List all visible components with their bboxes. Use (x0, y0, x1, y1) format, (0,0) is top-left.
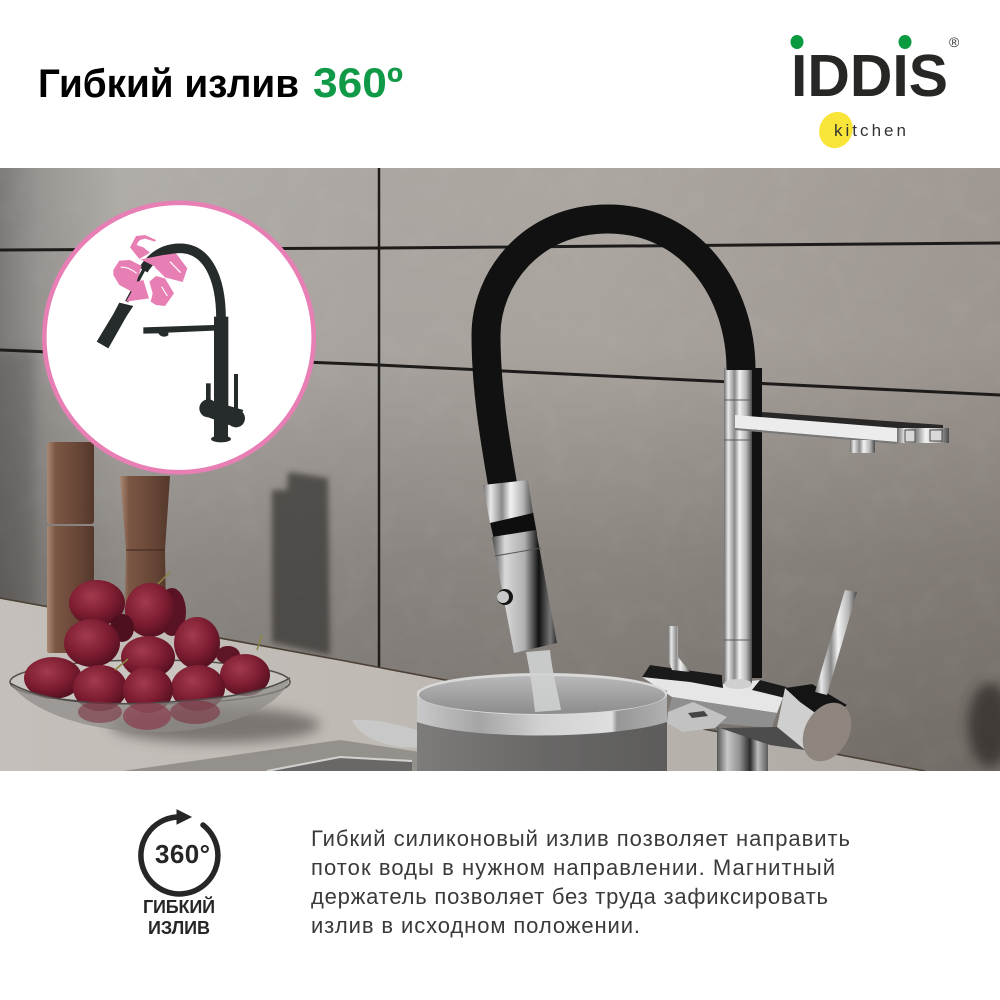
small lever (668, 626, 690, 672)
logo: IDDIS kitchen: IDDIS (791, 43, 948, 109)
mixer cone (777, 684, 847, 750)
wall shadow (272, 472, 330, 655)
icon: 360 degree badge (141, 810, 218, 894)
pull-out spray head (483, 480, 557, 653)
badge label: ИЗЛИВ (148, 918, 210, 938)
pot handles (352, 720, 417, 748)
faucet base (642, 590, 861, 771)
water stream (526, 650, 561, 712)
description text: держатель позволяет без труда зафиксировать (311, 884, 828, 909)
faucet column (724, 368, 752, 689)
wall tiles (0, 168, 1000, 771)
description text: поток воды в нужном направлении. Магнитный (311, 855, 835, 880)
logo: IDDIS kitchen (790, 34, 960, 154)
logo: IDDIS kitchen: kitchen (834, 121, 906, 140)
kitchen photo scene (0, 168, 1000, 775)
logo: IDDIS kitchen: ® (949, 34, 960, 50)
lever (815, 590, 857, 695)
icon: pink rotation arrows (113, 235, 187, 306)
circle badge (44, 203, 314, 472)
icon: faucet silhouette (97, 248, 245, 442)
plate shadow (110, 707, 320, 743)
base body (642, 665, 787, 713)
title: 360º (313, 59, 403, 106)
base pedestal (717, 727, 768, 771)
faucet side spout (735, 412, 949, 453)
title: Гибкий излив (38, 62, 299, 106)
faucet column shadow (752, 368, 762, 678)
description text (311, 826, 850, 938)
cooking pot (352, 673, 727, 775)
pepper mills (47, 442, 170, 653)
description text: излив в исходном положении. (311, 913, 640, 938)
description text: Гибкий силиконовый излив позволяет направить (311, 826, 850, 851)
badge label: ГИБКИЙ (143, 896, 215, 917)
countertop (0, 598, 925, 771)
icon: 360 degree badge: 360° (155, 839, 210, 869)
sink edge (123, 740, 420, 771)
flexible black hose (486, 219, 741, 487)
mixer disc (802, 702, 852, 762)
faucet diagram circle (44, 203, 314, 472)
badge label (143, 896, 215, 938)
bowl of plums (10, 572, 290, 732)
